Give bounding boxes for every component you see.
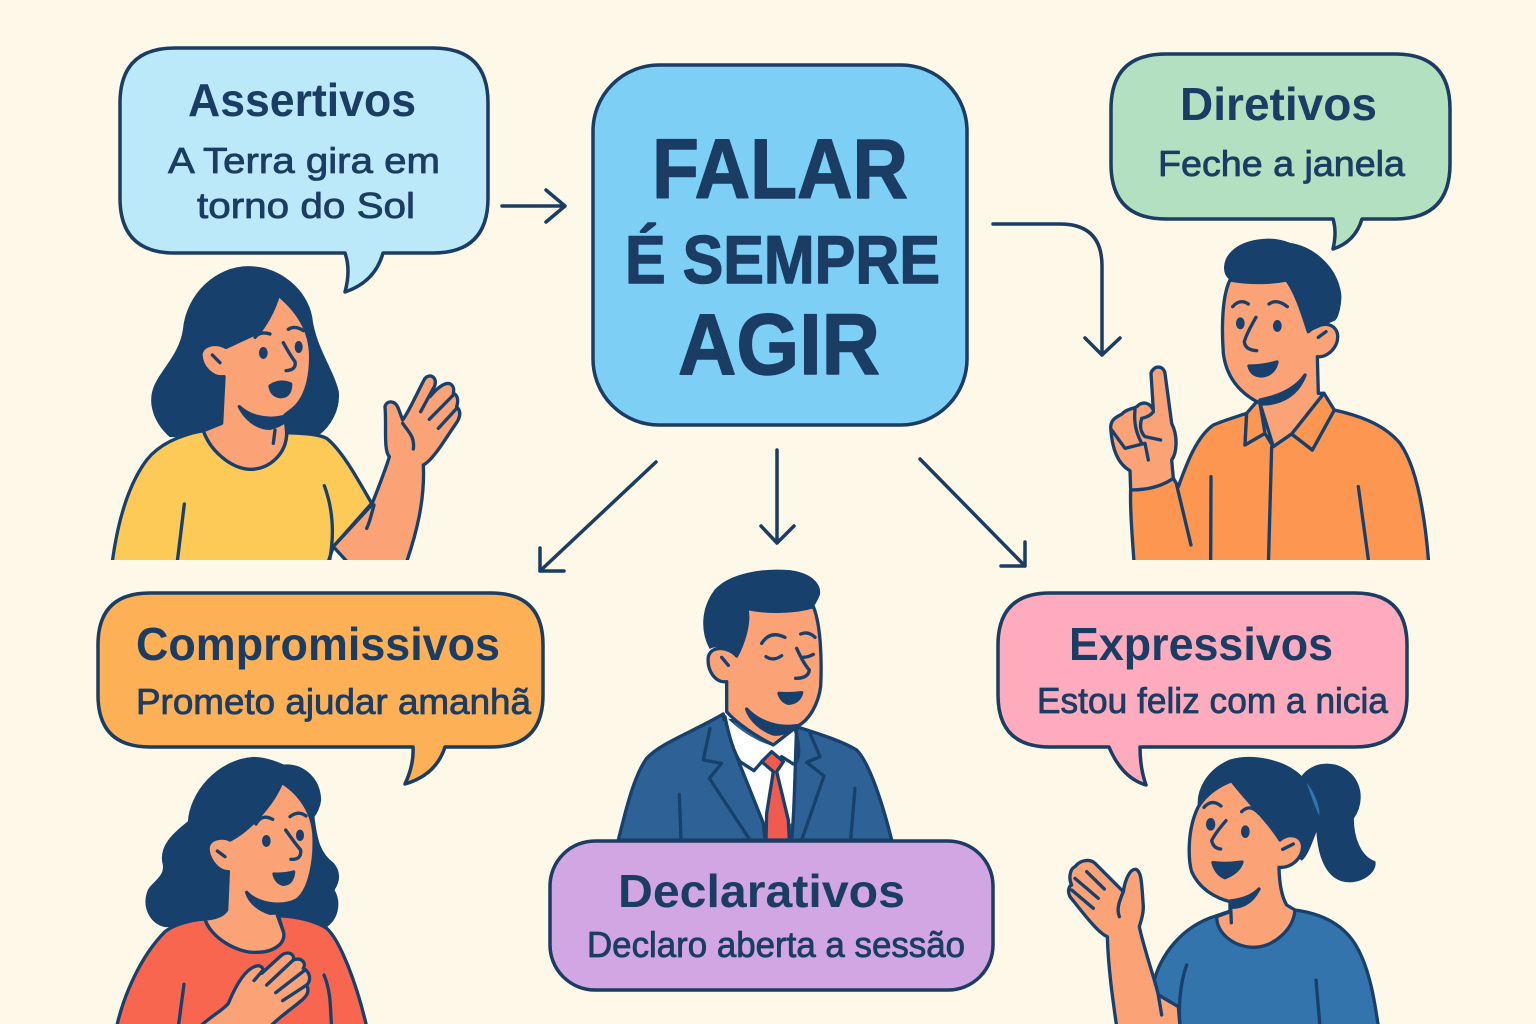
speech bubble: Diretivos: Diretivos — [1180, 78, 1377, 130]
speech bubble: Assertivos: A Terra gira em — [168, 140, 440, 181]
speech bubble: Declarativos: Declarativos — [618, 865, 905, 917]
panel: central message — [593, 65, 967, 425]
panel: central message: AGIR — [678, 297, 880, 393]
panel: central message: É SEMPRE — [625, 222, 940, 298]
speech bubble: Declarativos — [550, 841, 993, 990]
speech bubble: Expressivos: Estou feliz com a nicia — [1037, 680, 1389, 721]
panel: central message: FALAR — [652, 122, 908, 216]
arrow: Assertivos to centre — [502, 190, 565, 222]
figure: woman in red shirt, hand on chest — [117, 757, 367, 1024]
speech bubble: Compromissivos: Compromissivos — [136, 618, 500, 670]
speech bubble: Expressivos — [998, 593, 1407, 785]
speech bubble: Assertivos — [120, 48, 488, 292]
speech bubble: Expressivos: Expressivos — [1069, 618, 1333, 670]
speech bubble: Assertivos: Assertivos — [188, 74, 416, 126]
speech bubble: Assertivos: torno do Sol — [197, 185, 415, 226]
arrow: centre to Expressivos — [920, 459, 1025, 566]
arrow: centre to Diretivos — [993, 224, 1120, 355]
speech bubble: Diretivos: Feche a janela — [1158, 143, 1406, 184]
figure: man in orange shirt pointing — [1111, 239, 1429, 567]
speech bubble: Diretivos — [1111, 54, 1450, 249]
arrow: centre to Declarativos — [761, 450, 794, 543]
speech bubble: Compromissivos: Prometo ajudar amanhã — [136, 681, 532, 722]
arrow: centre to Compromissivos — [540, 462, 656, 571]
speech bubble: Compromissivos — [98, 593, 543, 784]
figure: woman in yellow shirt — [112, 267, 460, 567]
figure: woman in blue shirt with ponytail — [1069, 757, 1378, 1024]
speech bubble: Declarativos: Declaro aberta a sessão — [587, 924, 965, 965]
figure: man in blue suit — [618, 570, 892, 840]
